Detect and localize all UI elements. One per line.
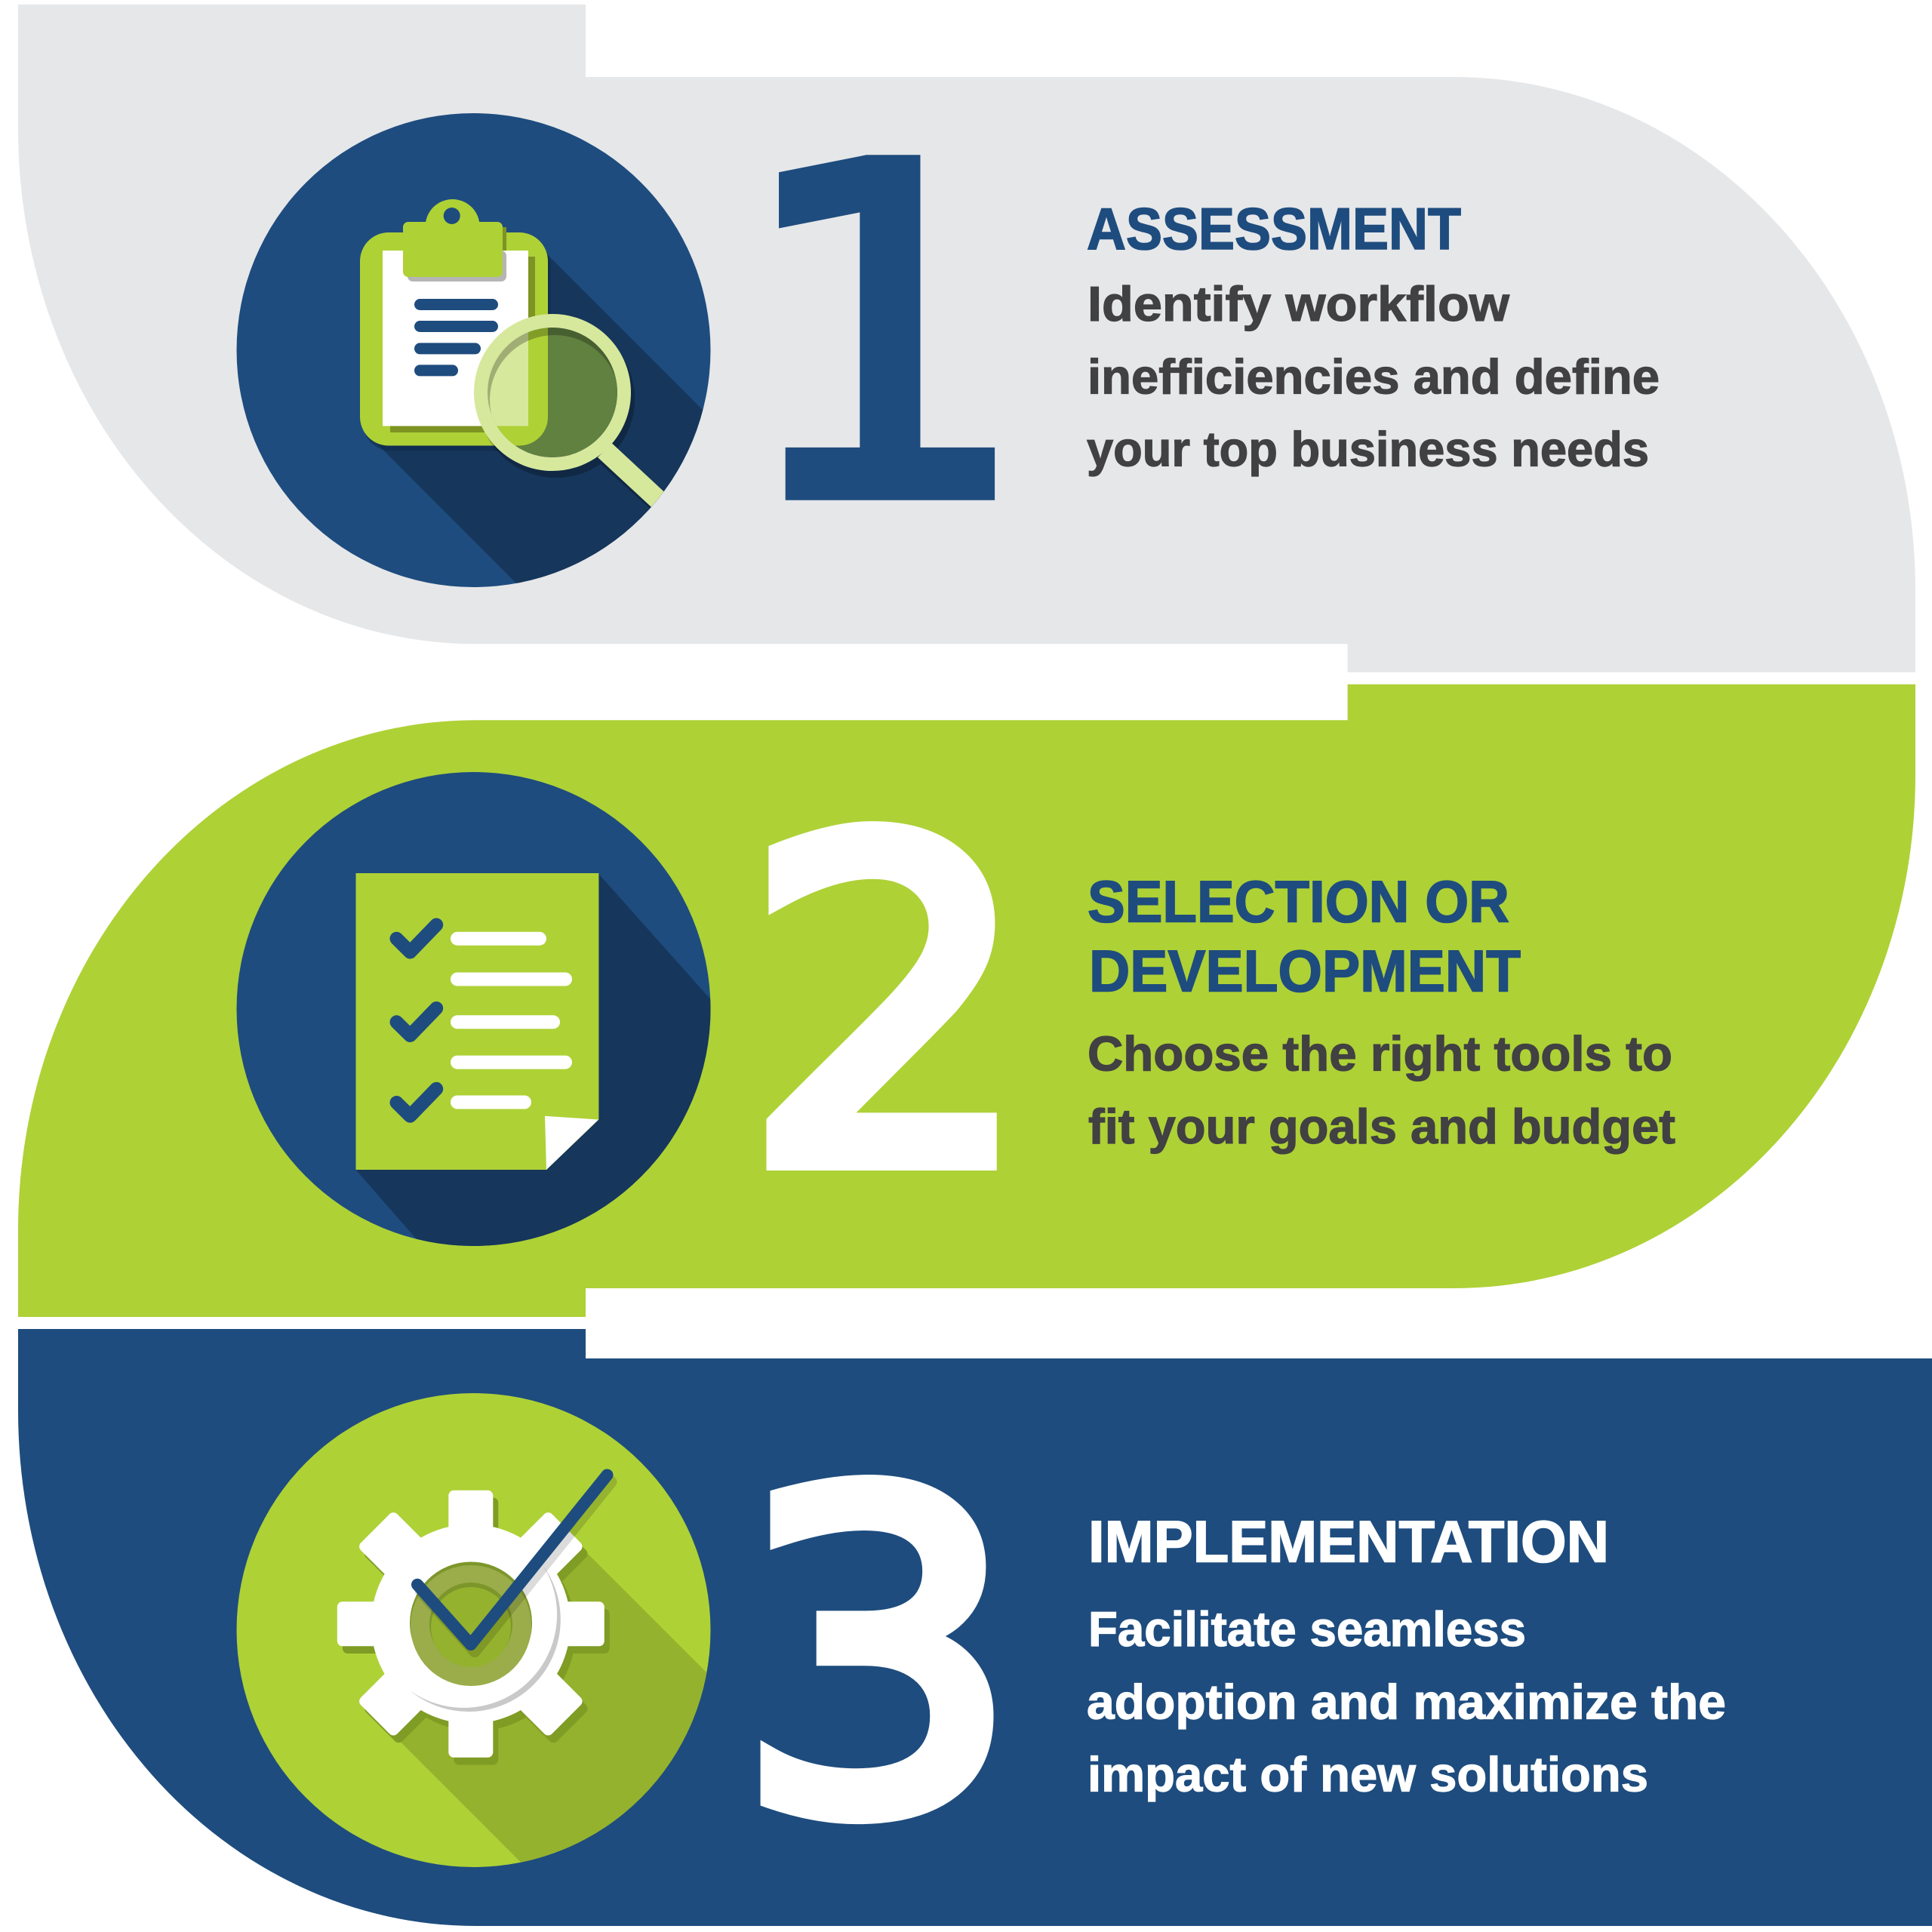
text: assessment description <box>1087 276 1660 477</box>
panel: step 2 selection or development <box>18 685 1915 1317</box>
panel shape: green band <box>18 685 1915 1317</box>
panel: step 1 assessment <box>18 5 1915 724</box>
icon: gear with check mark <box>237 1393 711 1867</box>
icon: checklist document <box>237 772 711 1246</box>
heading: implementation: IMPLEMENTATION <box>1088 1508 1609 1574</box>
heading: assessment: ASSESSMENT <box>1087 195 1461 262</box>
text: assessment description: your top business needs <box>1087 422 1649 477</box>
text: implementation description: Facilitate seamless <box>1088 1601 1526 1657</box>
heading: selection or development: SELECTION OR <box>1088 868 1509 934</box>
text: implementation description: impact of new solutions <box>1088 1746 1648 1801</box>
text: implementation description <box>1087 1601 1726 1801</box>
panel shape: navy band <box>18 1329 1932 1926</box>
panel shape: grey band <box>18 5 1915 672</box>
icon: clipboard with magnifying glass <box>237 113 711 587</box>
text: selection description <box>1088 1026 1675 1154</box>
number 2: 2 <box>744 749 1031 1265</box>
panel: step 3 implementation <box>18 1329 1932 1932</box>
heading: selection or development <box>1088 868 1521 1004</box>
number 3: 3 <box>737 1404 1019 1912</box>
text: selection description: fit your goals and budget <box>1088 1099 1675 1154</box>
text: assessment description: inefficiencies and define <box>1088 349 1660 405</box>
text: assessment description: Identify workflow <box>1088 276 1509 331</box>
text: selection description: Choose the right tools to <box>1088 1026 1672 1081</box>
heading: selection or development: DEVELOPMENT <box>1089 937 1521 1004</box>
text: implementation description: adoption and maximize the <box>1087 1674 1726 1729</box>
number 1: 1 <box>736 72 1029 599</box>
